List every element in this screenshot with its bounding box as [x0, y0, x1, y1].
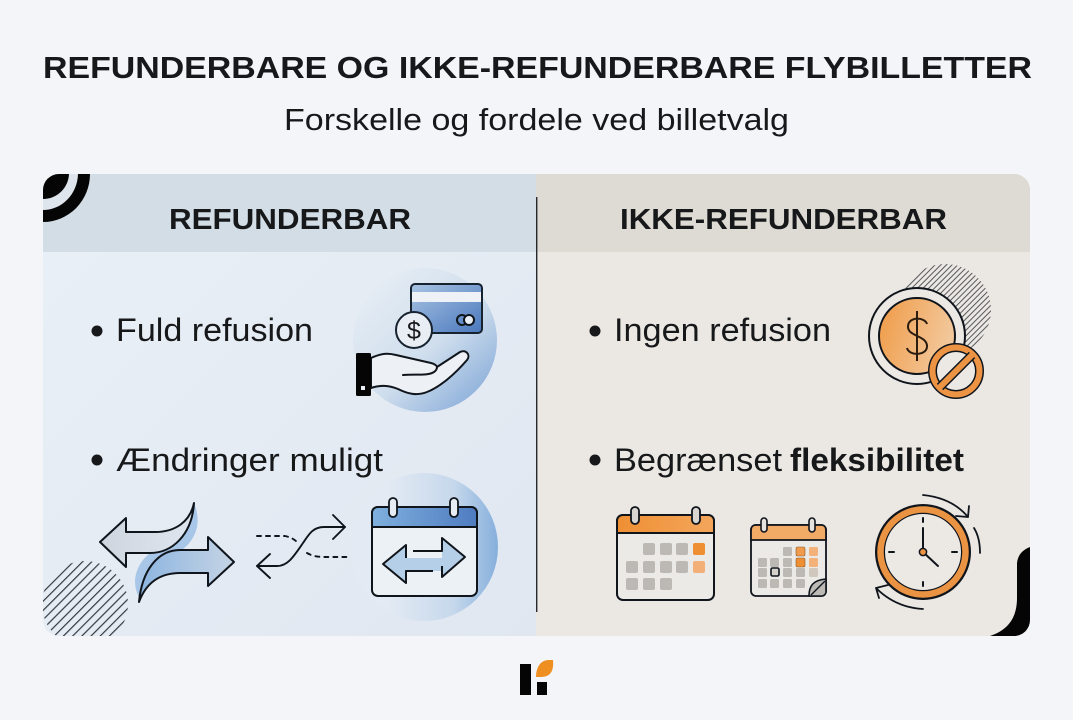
bullet: fuld refusion: Fuld refusion: [116, 312, 313, 348]
icon: coin with ban sign: [869, 264, 991, 394]
icon: small calendar: [751, 518, 826, 596]
icon: thin crossing arrows: [257, 515, 347, 578]
left panel header band: [43, 174, 536, 252]
logo: [520, 660, 553, 695]
heading: ikke-refunderbar: IKKE-REFUNDERBAR: [620, 204, 947, 236]
icon: hand with card and coin: $: [407, 317, 421, 345]
bullet: begraenset fleksibilitet: Begrænset: [614, 442, 782, 478]
right panel header band: [536, 174, 1030, 252]
subtitle: Forskelle og fordele ved billetvalg: [284, 102, 789, 137]
heading: refunderbar: REFUNDERBAR: [169, 204, 411, 236]
icon: calendar with arrows: [350, 473, 498, 621]
decoration: corner arcs: [43, 174, 90, 222]
bullet: ingen refusion: Ingen refusion: [614, 312, 831, 348]
bullet: aendringer muligt: Ændringer muligt: [116, 442, 383, 478]
icon: hand with card and coin: [353, 268, 497, 412]
icon: clock with arrows: [876, 495, 980, 609]
decoration: hatched circle: [43, 561, 128, 636]
decoration: black corner shape: [990, 547, 1030, 636]
bullet: begraenset fleksibilitet: [590, 442, 964, 478]
icon: large calendar: [617, 507, 714, 600]
title: REFUNDERBARE OG IKKE-REFUNDERBARE FLYBILLETTER: [43, 50, 1032, 85]
panel: ikke-refunderbar: [536, 174, 1030, 636]
icon: swap arrows: [100, 503, 234, 602]
bullet: begraenset fleksibilitet: fleksibilitet: [790, 442, 964, 478]
panel: refunderbar: [42, 174, 536, 647]
center divider: [536, 197, 537, 612]
